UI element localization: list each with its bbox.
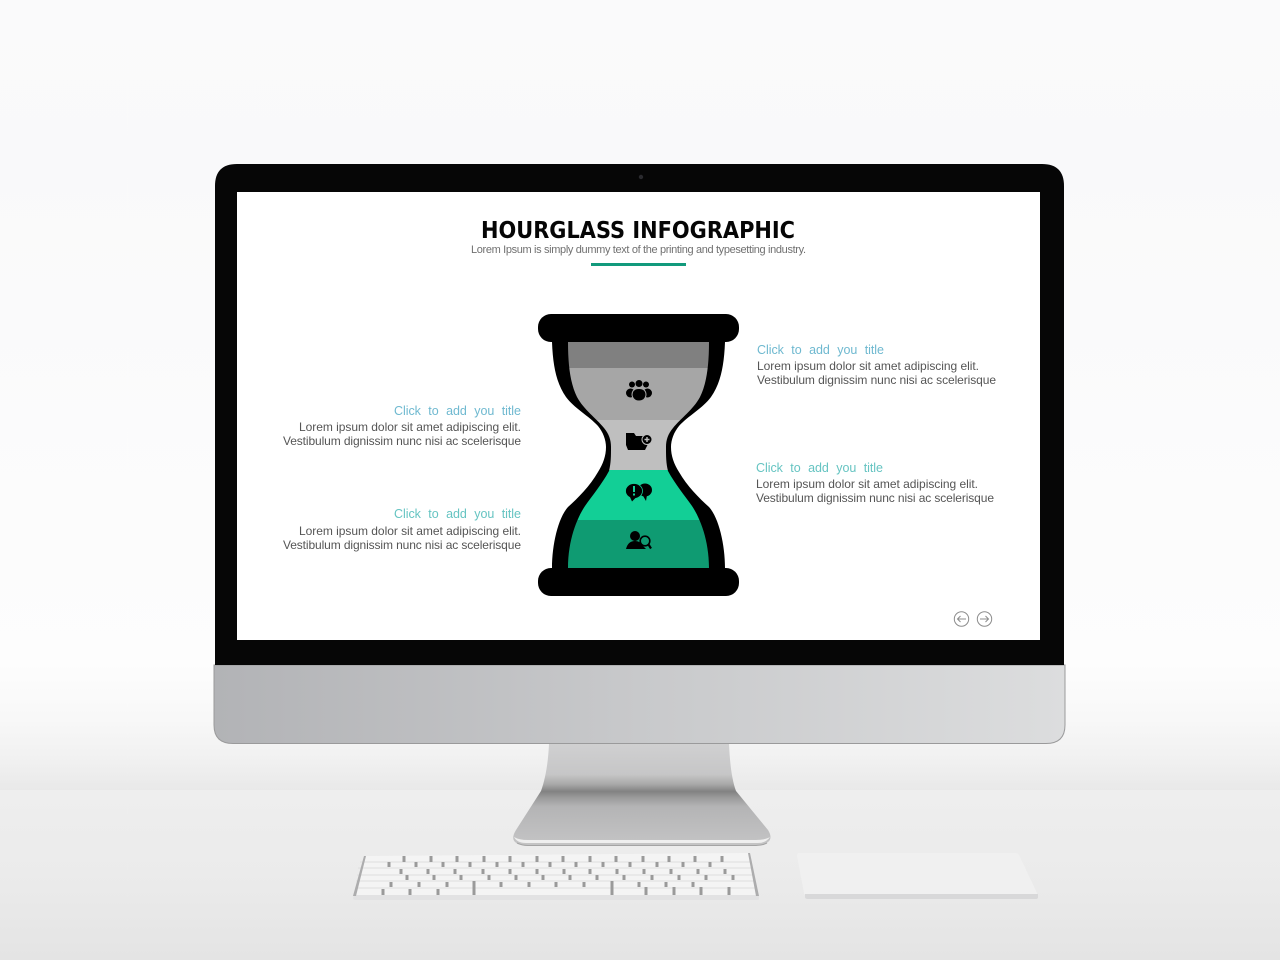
text block: lower right (756, 461, 994, 505)
webcam (639, 175, 643, 179)
text block: lower right: Click to add you title (756, 461, 883, 475)
monitor (214, 164, 1065, 744)
hourglass (538, 314, 739, 596)
text block: lower left: Click to add you title (394, 507, 521, 521)
text block: lower right: Vestibulum dignissim nunc nisi ac scelerisque (756, 491, 994, 505)
icon: previous arrow (954, 612, 969, 626)
text block: upper right (757, 343, 996, 387)
top cap (538, 314, 739, 342)
text block: upper right: Lorem ipsum dolor sit amet adipiscing elit. (757, 359, 979, 373)
icon: speech bubbles (626, 484, 652, 502)
text block: lower left (283, 507, 521, 552)
monitor bezel (215, 164, 1064, 665)
glass bands (568, 342, 709, 568)
text block: upper left: Lorem ipsum dolor sit amet adipiscing elit. (299, 420, 521, 434)
text block: upper right: Click to add you title (757, 343, 884, 357)
icon: next arrow (977, 612, 992, 626)
text block: lower left: Lorem ipsum dolor sit amet adipiscing elit. (299, 524, 521, 538)
icon: user with magnifier (626, 531, 651, 549)
slide title: HOURGLASS INFOGRAPHIC (481, 218, 795, 244)
title accent bar (591, 263, 686, 266)
text block: lower right: Lorem ipsum dolor sit amet adipiscing elit. (756, 477, 978, 491)
keyboard (353, 853, 759, 900)
text block: lower left: Vestibulum dignissim nunc nisi ac scelerisque (283, 538, 521, 552)
slide subtitle: Lorem Ipsum is simply dummy text of the printing and typesetting industry. (471, 244, 806, 256)
monitor stand (513, 744, 770, 846)
hourglass body (552, 335, 725, 575)
desk surface (0, 790, 1280, 960)
text block: upper left (283, 404, 521, 448)
icon: people group (626, 380, 652, 401)
screen (237, 192, 1040, 640)
monitor chin (214, 665, 1065, 744)
icon: folder with plus (626, 433, 652, 450)
trackpad (797, 853, 1038, 899)
text block: upper right: Vestibulum dignissim nunc nisi ac scelerisque (757, 373, 996, 387)
text block: upper left: Click to add you title (394, 404, 521, 418)
bottom cap (538, 568, 739, 596)
text block: upper left: Vestibulum dignissim nunc nisi ac scelerisque (283, 434, 521, 448)
